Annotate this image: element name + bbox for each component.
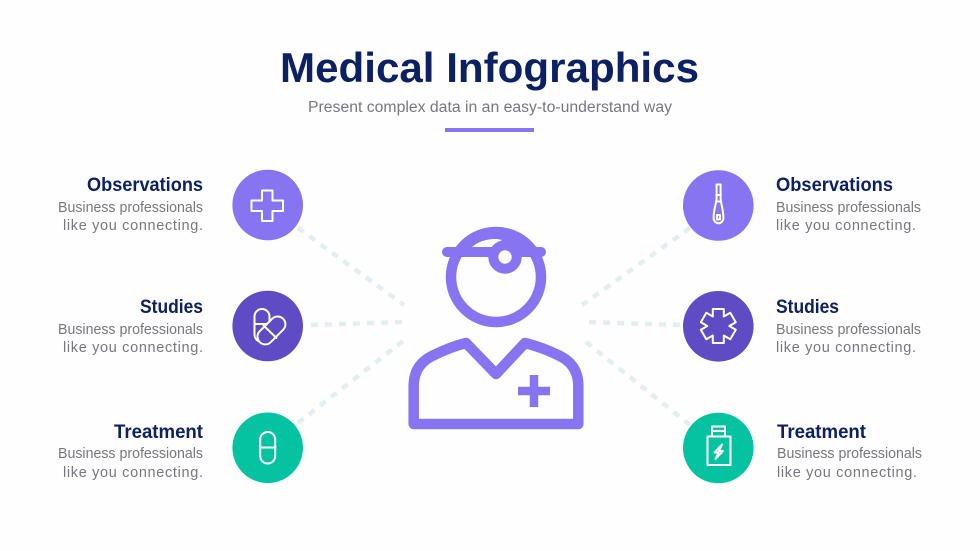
- icon: star of life: [683, 291, 754, 362]
- left item: studies: [58, 297, 203, 356]
- right item: treatment: Treatment: [777, 422, 867, 443]
- icon: thermometer: [683, 170, 754, 241]
- right item: treatment: Business professionals: [777, 446, 922, 462]
- left item: observations: Observations: [87, 175, 203, 196]
- icon: battery bottle: [683, 413, 754, 483]
- left item: studies: Studies: [140, 297, 203, 318]
- right item: treatment: like you connecting.: [777, 465, 917, 481]
- left item: treatment: Treatment: [114, 422, 204, 443]
- right item: studies: like you connecting.: [776, 340, 916, 356]
- right item: observations: like you connecting.: [776, 218, 916, 234]
- icon: capsule: [232, 412, 303, 483]
- right item: studies: Studies: [776, 297, 839, 318]
- left item: treatment: [58, 422, 204, 481]
- right item: observations: Observations: [776, 175, 893, 196]
- left item: observations: [58, 175, 203, 234]
- right item: studies: [776, 297, 921, 356]
- left item: observations: Business professionals: [58, 200, 203, 216]
- icon: pills: [232, 291, 303, 361]
- right item: treatment: [777, 422, 922, 481]
- left item: studies: like you connecting.: [63, 340, 203, 356]
- right item: observations: Business professionals: [776, 200, 921, 216]
- left item: observations: like you connecting.: [63, 218, 203, 234]
- left item: studies: Business professionals: [58, 322, 203, 338]
- central doctor icon: [414, 232, 578, 424]
- icon: medical cross: [232, 170, 303, 240]
- left item: treatment: Business professionals: [58, 446, 203, 462]
- subtitle: Present complex data in an easy-to-understand way: [308, 99, 672, 116]
- title: Medical Infographics: [280, 44, 699, 91]
- title underline: [445, 128, 534, 132]
- right item: studies: Business professionals: [776, 322, 921, 338]
- right item: observations: [776, 175, 921, 234]
- left item: treatment: like you connecting.: [63, 465, 203, 481]
